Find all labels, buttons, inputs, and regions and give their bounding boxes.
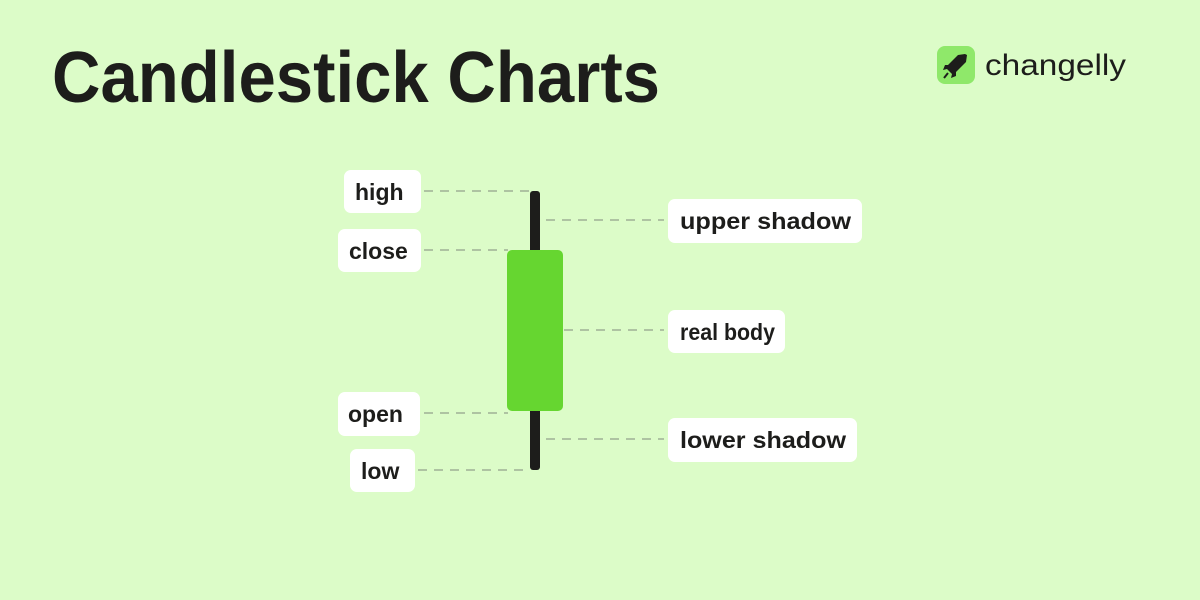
label: high bbox=[344, 170, 421, 213]
label: lower shadow bbox=[668, 418, 857, 462]
label: open bbox=[338, 392, 420, 436]
label: close bbox=[338, 229, 421, 272]
logo: changelly: changelly bbox=[985, 49, 1126, 82]
logo: changelly bbox=[937, 46, 1126, 84]
label: low bbox=[350, 449, 415, 492]
label: upper shadow: upper shadow bbox=[680, 208, 851, 234]
real body bbox=[507, 250, 563, 411]
label: upper shadow bbox=[668, 199, 862, 243]
label: close: close bbox=[349, 238, 408, 264]
label: lower shadow: lower shadow bbox=[680, 427, 846, 453]
dashed connectors bbox=[418, 191, 664, 470]
icon: rocket bbox=[937, 46, 975, 84]
candlestick bbox=[507, 191, 563, 470]
wick bbox=[530, 191, 540, 470]
label: real body: real body bbox=[680, 319, 775, 345]
label: real body bbox=[668, 310, 785, 353]
label: low: low bbox=[361, 458, 399, 484]
label: high: high bbox=[355, 179, 404, 205]
label: open: open bbox=[348, 401, 403, 427]
title: Candlestick Charts bbox=[52, 38, 660, 118]
